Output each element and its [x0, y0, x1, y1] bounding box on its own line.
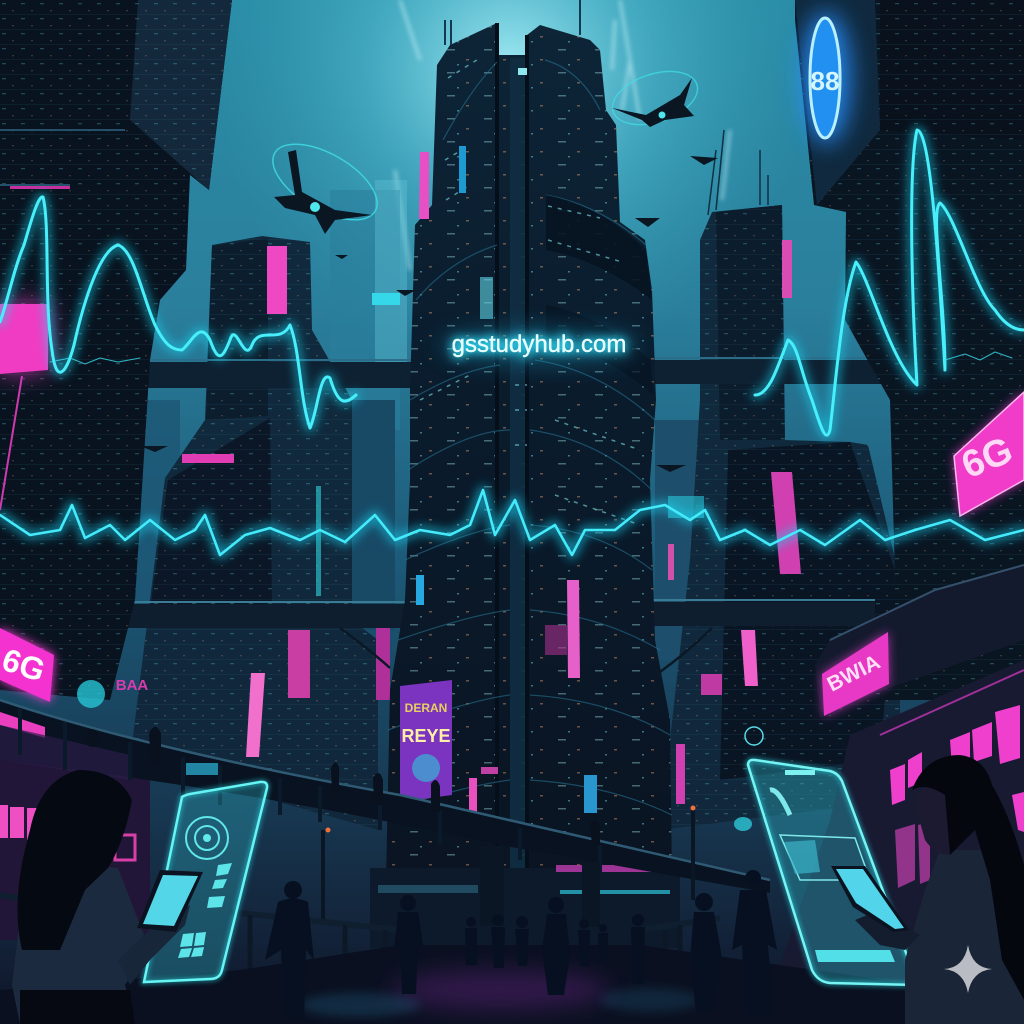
sparkle watermark	[944, 945, 992, 993]
tower base	[370, 865, 680, 948]
right lower building with magenta windows: BWIA	[824, 651, 884, 697]
brand label: gsstudyhub.com	[452, 331, 626, 358]
right foreground skyscraper: 88	[811, 66, 839, 96]
upper skybridges	[145, 358, 885, 388]
flying drones	[140, 62, 718, 472]
street pedestrians	[265, 870, 777, 1018]
brand label	[439, 328, 639, 364]
elevated curved walkway	[0, 700, 770, 927]
left foreground skyscraper	[0, 0, 232, 700]
drone right	[606, 62, 704, 134]
left tablet	[137, 870, 203, 932]
drone left	[261, 129, 389, 235]
small icon sign left	[77, 677, 148, 708]
central tower	[386, 0, 672, 880]
poster on tower	[400, 680, 452, 802]
central core column	[510, 58, 528, 878]
lower skybridges	[110, 600, 875, 672]
small icon sign left: BAA	[116, 677, 148, 694]
brand label: gsstudyhub.com	[452, 331, 626, 358]
wet street	[0, 945, 1024, 1024]
right foreground skyscraper	[795, 0, 1024, 700]
right tablet	[831, 866, 909, 932]
walkway pedestrians	[85, 727, 600, 845]
right lower building with magenta windows	[760, 565, 1024, 1024]
signal wave: centre horizontal	[0, 490, 1024, 555]
mid-right skyscrapers	[660, 130, 900, 831]
left hologram panel	[144, 782, 267, 982]
far background towers	[130, 180, 750, 660]
poster on tower: REYE	[401, 726, 451, 746]
street railing	[0, 895, 720, 975]
right 6G sign	[954, 392, 1024, 516]
signal wave: upper left	[0, 197, 356, 428]
left 6G sign	[0, 628, 54, 702]
left lower magenta storefronts	[0, 740, 150, 940]
signal wave: upper right	[755, 130, 1024, 435]
left foreground woman with tablet	[12, 770, 203, 1024]
right foreground woman with tablet	[831, 755, 1024, 1024]
right hologram panel	[748, 760, 918, 985]
right 6G sign: 6G	[956, 429, 1019, 487]
poster on tower: DERAN	[405, 701, 447, 715]
mid-left skyscrapers	[130, 236, 390, 830]
